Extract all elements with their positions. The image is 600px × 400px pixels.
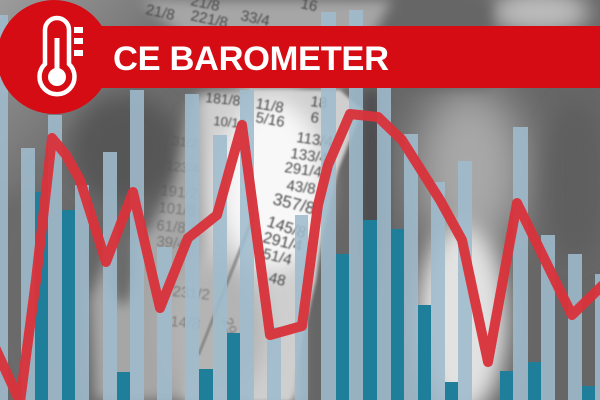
newspaper figures: 357/8	[271, 189, 317, 218]
newspaper figures: 145/8	[265, 214, 308, 242]
newspaper figures: 6	[309, 109, 320, 127]
newspaper figures: 133/4	[289, 145, 329, 167]
newspaper figures	[144, 0, 334, 349]
newspaper figures: 221/8	[189, 7, 229, 32]
newspaper figures: 113/4	[295, 129, 334, 151]
red trend line	[0, 114, 600, 400]
newspaper figures: 48	[267, 269, 287, 290]
newspaper figures: 191/2	[160, 182, 199, 203]
newspaper figures: 10/16	[213, 113, 247, 131]
newspaper figures: 29/4	[218, 316, 244, 349]
newspaper figures: 39/4	[156, 233, 186, 253]
newspaper figures: 231/2	[172, 283, 211, 304]
newspaper figures: 123/4	[166, 158, 200, 176]
newspaper figures: 291/4	[261, 229, 304, 256]
newspaper figures: 291/4	[283, 159, 323, 181]
title banner	[0, 0, 600, 114]
newspaper figures: 31/2	[172, 133, 198, 151]
newspaper figures: 14/8	[170, 313, 200, 333]
newspaper figures: 33/4	[239, 7, 271, 30]
icon: thermometer	[40, 18, 83, 94]
newspaper figures: 181/8	[205, 89, 241, 109]
newspaper sheet	[90, 0, 392, 400]
newspaper figures: 101/8	[158, 199, 197, 220]
newspaper figures: 5/16	[254, 109, 286, 131]
newspaper figures: 61/8	[156, 217, 186, 237]
newspaper figures: 18	[309, 93, 328, 112]
newspaper figures: 21/8	[144, 1, 176, 24]
newspaper figures: 11/8	[254, 95, 285, 117]
newspaper figures: 43/8	[285, 177, 317, 198]
title text: CE BAROMETER	[113, 40, 389, 78]
newspaper figures: 51/4	[261, 245, 293, 269]
badge circle	[0, 0, 111, 114]
bar chart: teal bars	[35, 192, 595, 400]
